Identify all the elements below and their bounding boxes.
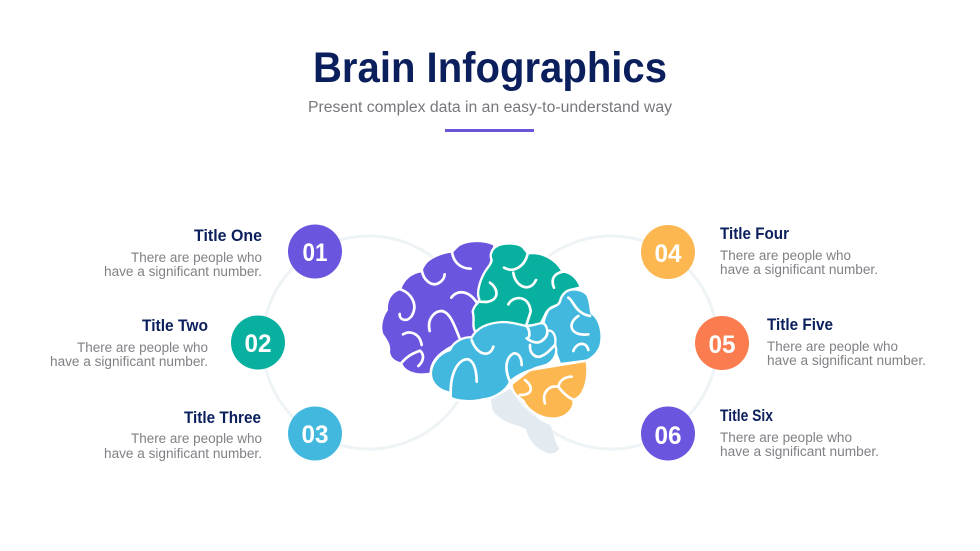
text 06: have a significant number. bbox=[720, 444, 879, 459]
text 03: Title Three bbox=[184, 409, 261, 427]
brain illustration bbox=[382, 241, 602, 453]
item 03 bbox=[104, 406, 342, 461]
lobe: blue temporal bbox=[431, 322, 556, 401]
text 03: have a significant number. bbox=[104, 446, 262, 461]
text 01 bbox=[104, 227, 262, 279]
item 01 bbox=[104, 224, 342, 279]
badge 02 bbox=[231, 316, 285, 370]
badge 01: 01 bbox=[302, 239, 328, 267]
text 06: There are people who bbox=[720, 430, 852, 445]
lobe: purple frontal bbox=[382, 241, 494, 374]
item 05 bbox=[695, 316, 926, 370]
sulci: white folds bbox=[400, 252, 590, 403]
brain stem bbox=[491, 389, 559, 453]
badge 05 bbox=[695, 316, 749, 370]
title: Brain Infographics bbox=[313, 44, 667, 92]
text 03: There are people who bbox=[131, 431, 262, 446]
badge 03: 03 bbox=[302, 421, 328, 449]
text 05: have a significant number. bbox=[767, 353, 926, 368]
text 01: There are people who bbox=[131, 250, 262, 265]
badge 06 bbox=[641, 406, 695, 460]
text 01: have a significant number. bbox=[104, 264, 262, 279]
item 02 bbox=[50, 316, 285, 370]
badge 04: 04 bbox=[654, 240, 682, 268]
text 01: Title One bbox=[194, 227, 262, 245]
text 02: Title Two bbox=[142, 317, 208, 335]
text 05 bbox=[767, 316, 926, 368]
item 04 bbox=[641, 225, 878, 279]
text 04: Title Four bbox=[720, 225, 790, 243]
badge 04 bbox=[641, 225, 695, 279]
lobe: yellow occipital bbox=[512, 361, 587, 419]
lobe: teal parietal bbox=[473, 243, 581, 332]
text 04: have a significant number. bbox=[720, 262, 878, 277]
text 06 bbox=[720, 407, 879, 459]
text 04 bbox=[720, 225, 878, 277]
text 06: Title Six bbox=[720, 407, 774, 425]
connector rings bbox=[262, 236, 718, 449]
badge 06: 06 bbox=[654, 422, 682, 450]
badge 03 bbox=[288, 406, 342, 460]
text 02: There are people who bbox=[77, 340, 208, 355]
text 05: There are people who bbox=[767, 339, 898, 354]
subtitle: Present complex data in an easy-to-understand way bbox=[308, 99, 672, 116]
badge 02: 02 bbox=[244, 330, 272, 358]
lobe: blue right bbox=[543, 289, 602, 364]
text 02: have a significant number. bbox=[50, 354, 208, 369]
badge 01 bbox=[288, 224, 342, 278]
item 06 bbox=[641, 406, 879, 460]
text 02 bbox=[50, 317, 208, 369]
badge 05: 05 bbox=[708, 331, 736, 359]
title underline bbox=[445, 129, 534, 132]
text 04: There are people who bbox=[720, 248, 851, 263]
text 05: Title Five bbox=[767, 316, 833, 334]
text 03 bbox=[104, 409, 262, 461]
